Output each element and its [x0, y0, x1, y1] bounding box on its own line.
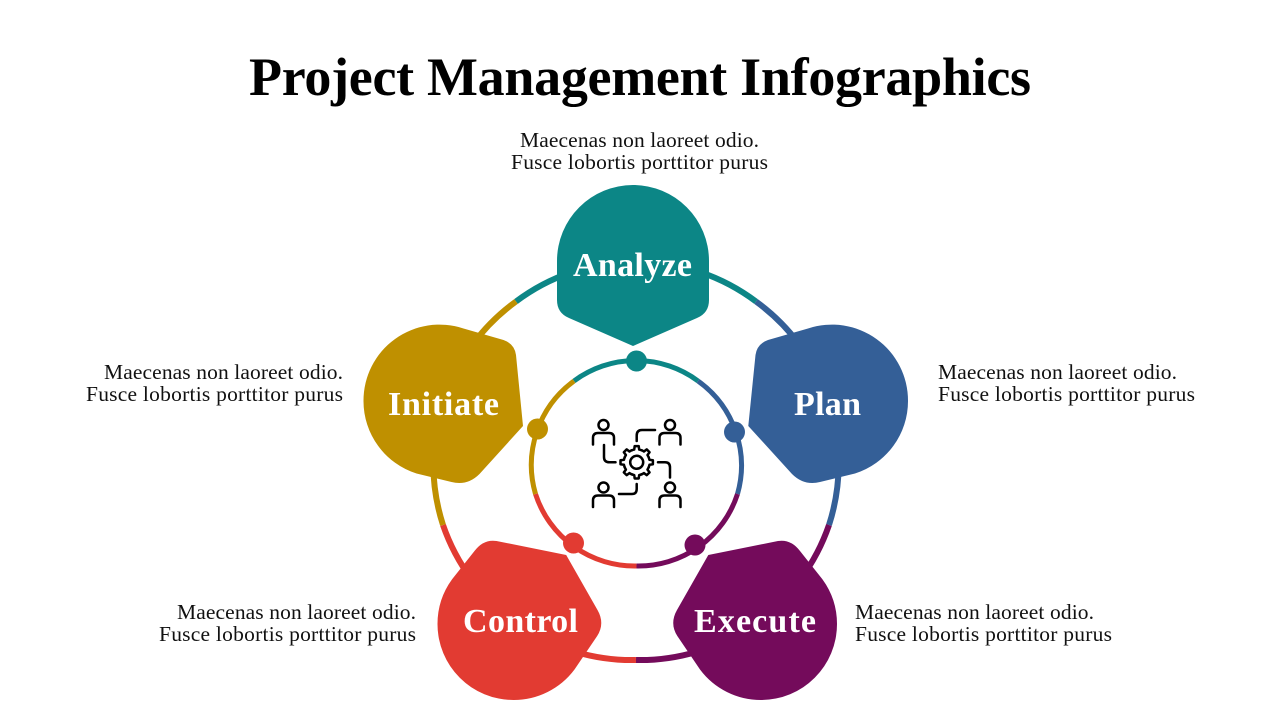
text block: analyze	[511, 128, 768, 174]
panel: plan: Plan	[794, 386, 861, 423]
text block: control	[159, 600, 416, 646]
icon: team around gear	[593, 420, 680, 507]
panel: initiate	[363, 325, 523, 483]
text block: control: Maecenas non laoreet odio.	[177, 600, 416, 624]
text block: initiate: Maecenas non laoreet odio.	[104, 360, 343, 384]
outer ring	[433, 262, 839, 660]
panel: control	[438, 541, 601, 700]
title: Project Management Infographics	[249, 47, 1031, 107]
panel: execute: Execute	[694, 603, 816, 640]
panel: initiate: Initiate	[388, 386, 499, 423]
text block: execute	[855, 600, 1112, 646]
text block: initiate: Fusce lobortis porttitor purus	[86, 382, 343, 406]
panel: control: Control	[463, 603, 578, 640]
text block: analyze: Fusce lobortis porttitor purus	[511, 150, 768, 174]
panel: analyze	[557, 185, 709, 346]
panel: analyze: Analyze	[573, 247, 692, 284]
ring node dots	[527, 350, 745, 556]
text block: plan: Fusce lobortis porttitor purus	[938, 382, 1195, 406]
panel: execute	[673, 541, 837, 700]
text block: plan: Maecenas non laoreet odio.	[938, 360, 1177, 384]
text block: initiate	[86, 360, 343, 406]
panel: plan	[748, 325, 908, 483]
text block: execute: Fusce lobortis porttitor purus	[855, 622, 1112, 646]
text block: execute: Maecenas non laoreet odio.	[855, 600, 1094, 624]
text block: plan	[938, 360, 1195, 406]
text block: analyze: Maecenas non laoreet odio.	[520, 128, 759, 152]
inner ring	[531, 360, 741, 566]
text block: control: Fusce lobortis porttitor purus	[159, 622, 416, 646]
